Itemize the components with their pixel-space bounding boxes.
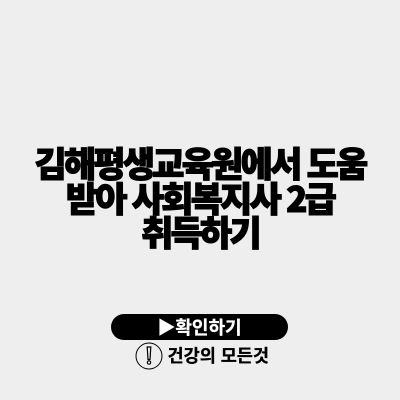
title: 받아 사회복지사 2급 xyxy=(66,172,334,222)
title: 취득하기 xyxy=(141,206,259,257)
icon: exclamation circle xyxy=(136,342,162,370)
button: 확인하기 xyxy=(111,314,288,340)
title xyxy=(34,137,368,257)
title: 김해평생교육원에서 도움 xyxy=(34,137,366,188)
button: 확인하기: ▶확인하기 xyxy=(157,314,242,340)
brand text: 건강의 모든것 xyxy=(168,343,269,368)
